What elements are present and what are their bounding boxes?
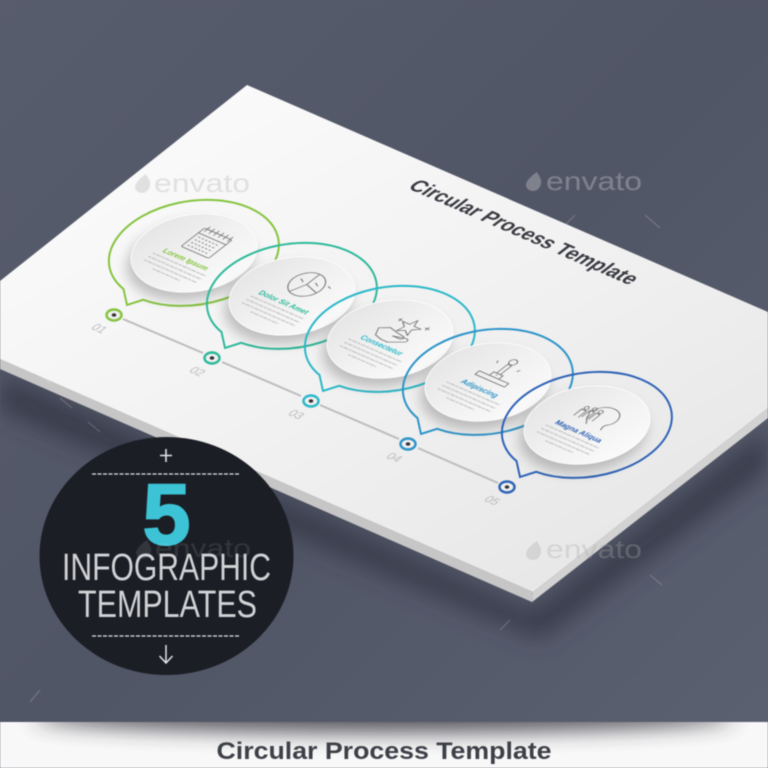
disc 1 content: [140, 220, 247, 286]
disc 2: [223, 248, 361, 344]
speech bubble outline 2: [207, 243, 377, 349]
label: Dolor Sit Amet: Dolor Sit Amet: [256, 289, 312, 316]
bottom caption: Circular Process Template: [216, 738, 552, 765]
watermark: envato on badge: [136, 533, 251, 563]
top dashed rule: [92, 473, 240, 475]
body text lines 2: [238, 296, 304, 329]
body text lines 5: [533, 425, 599, 458]
disc shadow 1: [121, 213, 259, 309]
label: Lorem Ipsum: Lorem Ipsum: [160, 247, 211, 272]
disc shadow 2: [219, 256, 357, 352]
timeline marker 03: 03: [285, 407, 308, 422]
label: Consectetur: Consectetur: [358, 334, 406, 357]
icon: calendar: [181, 226, 235, 258]
speech bubble outline 1: [109, 200, 279, 306]
timeline marker 04: [383, 438, 416, 465]
timeline marker 05: 05: [481, 493, 504, 508]
watermark: envato bottom right: [526, 534, 642, 564]
timeline line: [123, 319, 498, 483]
label: Magna Aliqua: Magna Aliqua: [552, 419, 605, 444]
step 4: [403, 329, 573, 438]
step 5: [502, 372, 672, 481]
timeline marker 05: [481, 482, 514, 508]
step 2: [207, 243, 377, 352]
icon: plus: [160, 449, 172, 462]
timeline marker 01: 01: [88, 321, 111, 336]
badge: 5 infographic templates: [40, 437, 294, 675]
timeline marker 02: [186, 352, 220, 379]
board title: Circular Process Template: [403, 176, 644, 288]
disc 5 content: [533, 396, 636, 458]
board with shadow: [0, 85, 768, 640]
watermark: envato top right: [526, 166, 642, 196]
speech bubble outline 4: [403, 329, 573, 435]
speech bubble outline 3: [305, 286, 475, 392]
icon: head with people: [571, 400, 626, 431]
disc 4 content: [434, 348, 543, 415]
body text lines 3: [336, 339, 402, 372]
watermark: envato on badge: envato: [155, 533, 251, 563]
icon: down arrow: [160, 645, 172, 663]
icon: hand with star: [370, 312, 433, 349]
disc 3: [321, 291, 459, 387]
watermark: envato top left: [135, 168, 250, 198]
watermark: envato top right: envato: [546, 166, 642, 196]
watermark: envato top left: envato: [154, 168, 250, 198]
bottom white strip: [0, 721, 768, 768]
disc shadow 3: [317, 299, 455, 395]
step 3: [305, 286, 475, 395]
text: TEMPLATES: TEMPLATES: [78, 584, 257, 626]
watermark: envato bottom right: envato: [546, 534, 642, 564]
text: INFOGRAPHIC: INFOGRAPHIC: [62, 547, 271, 589]
body text lines 1: [140, 253, 206, 286]
step 1: [109, 200, 279, 309]
disc 4: [419, 334, 557, 430]
timeline marker 04: 04: [383, 450, 406, 465]
disc shadow 4: [415, 342, 553, 438]
icon: figure on podium: [475, 354, 531, 387]
timeline marker 01: [88, 310, 122, 336]
disc 3 content: [336, 308, 442, 372]
body text lines 4: [434, 382, 500, 415]
number 5: 5: [143, 467, 190, 563]
timeline marker 02: 02: [186, 364, 209, 379]
disc shadow 5: [514, 385, 652, 481]
disc 1: [125, 205, 263, 301]
disc 2 content: [238, 263, 346, 329]
badge circle: [40, 437, 294, 675]
icon: divided circle: [280, 268, 338, 303]
timeline marker 03: [285, 396, 318, 422]
label: Adipiscing: Adipiscing: [458, 378, 501, 399]
speech bubble outline 5: [502, 372, 672, 478]
bottom dashed rule: [92, 635, 240, 637]
disc 5: [518, 377, 656, 473]
